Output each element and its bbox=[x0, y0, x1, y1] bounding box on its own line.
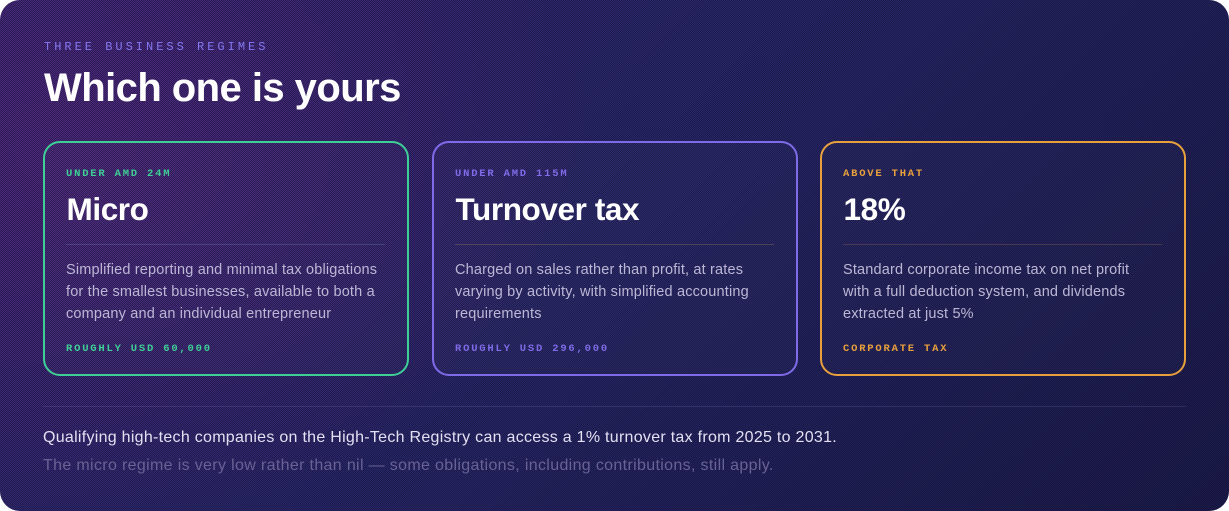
note: high-tech: Qualifying high-tech companies on the High-Tech Registry can access a 1% turnover tax from 2025 to 2031. bbox=[43, 429, 837, 446]
corporate description: with a full deduction system, and dividends bbox=[843, 284, 1125, 300]
micro threshold: UNDER AMD 24M bbox=[66, 168, 171, 180]
eyebrow: THREE BUSINESS REGIMES bbox=[44, 40, 268, 54]
panel: corporate tax bbox=[820, 141, 1186, 376]
turnover description: Charged on sales rather than profit, at rates bbox=[455, 262, 743, 278]
micro footer: ROUGHLY USD 60,000 bbox=[66, 343, 212, 355]
panel: micro bbox=[43, 141, 409, 376]
turnover heading: Turnover tax bbox=[456, 190, 639, 226]
micro description bbox=[66, 262, 377, 322]
corporate threshold: ABOVE THAT bbox=[843, 168, 924, 180]
micro heading: Micro bbox=[66, 190, 149, 226]
corporate description bbox=[843, 262, 1129, 322]
corporate footer: CORPORATE TAX bbox=[843, 343, 948, 355]
title: Which one is yours bbox=[44, 66, 401, 110]
corporate heading: 18% bbox=[844, 190, 905, 226]
turnover description bbox=[455, 262, 749, 322]
panel: turnover tax bbox=[432, 141, 798, 376]
micro description: company and an individual entrepreneur bbox=[66, 306, 331, 322]
turnover threshold: UNDER AMD 115M bbox=[455, 168, 568, 180]
micro description: Simplified reporting and minimal tax obligations bbox=[66, 262, 377, 278]
turnover footer: ROUGHLY USD 296,000 bbox=[455, 343, 609, 355]
turnover description: varying by activity, with simplified accounting bbox=[455, 284, 749, 300]
note: micro regime: The micro regime is very low rather than nil — some obligations, including contributions, still apply. bbox=[43, 457, 774, 474]
corporate description: extracted at just 5% bbox=[843, 306, 974, 322]
turnover description: requirements bbox=[455, 306, 542, 322]
micro description: for the smallest businesses, available to both a bbox=[66, 284, 375, 300]
corporate description: Standard corporate income tax on net profit bbox=[843, 262, 1129, 278]
